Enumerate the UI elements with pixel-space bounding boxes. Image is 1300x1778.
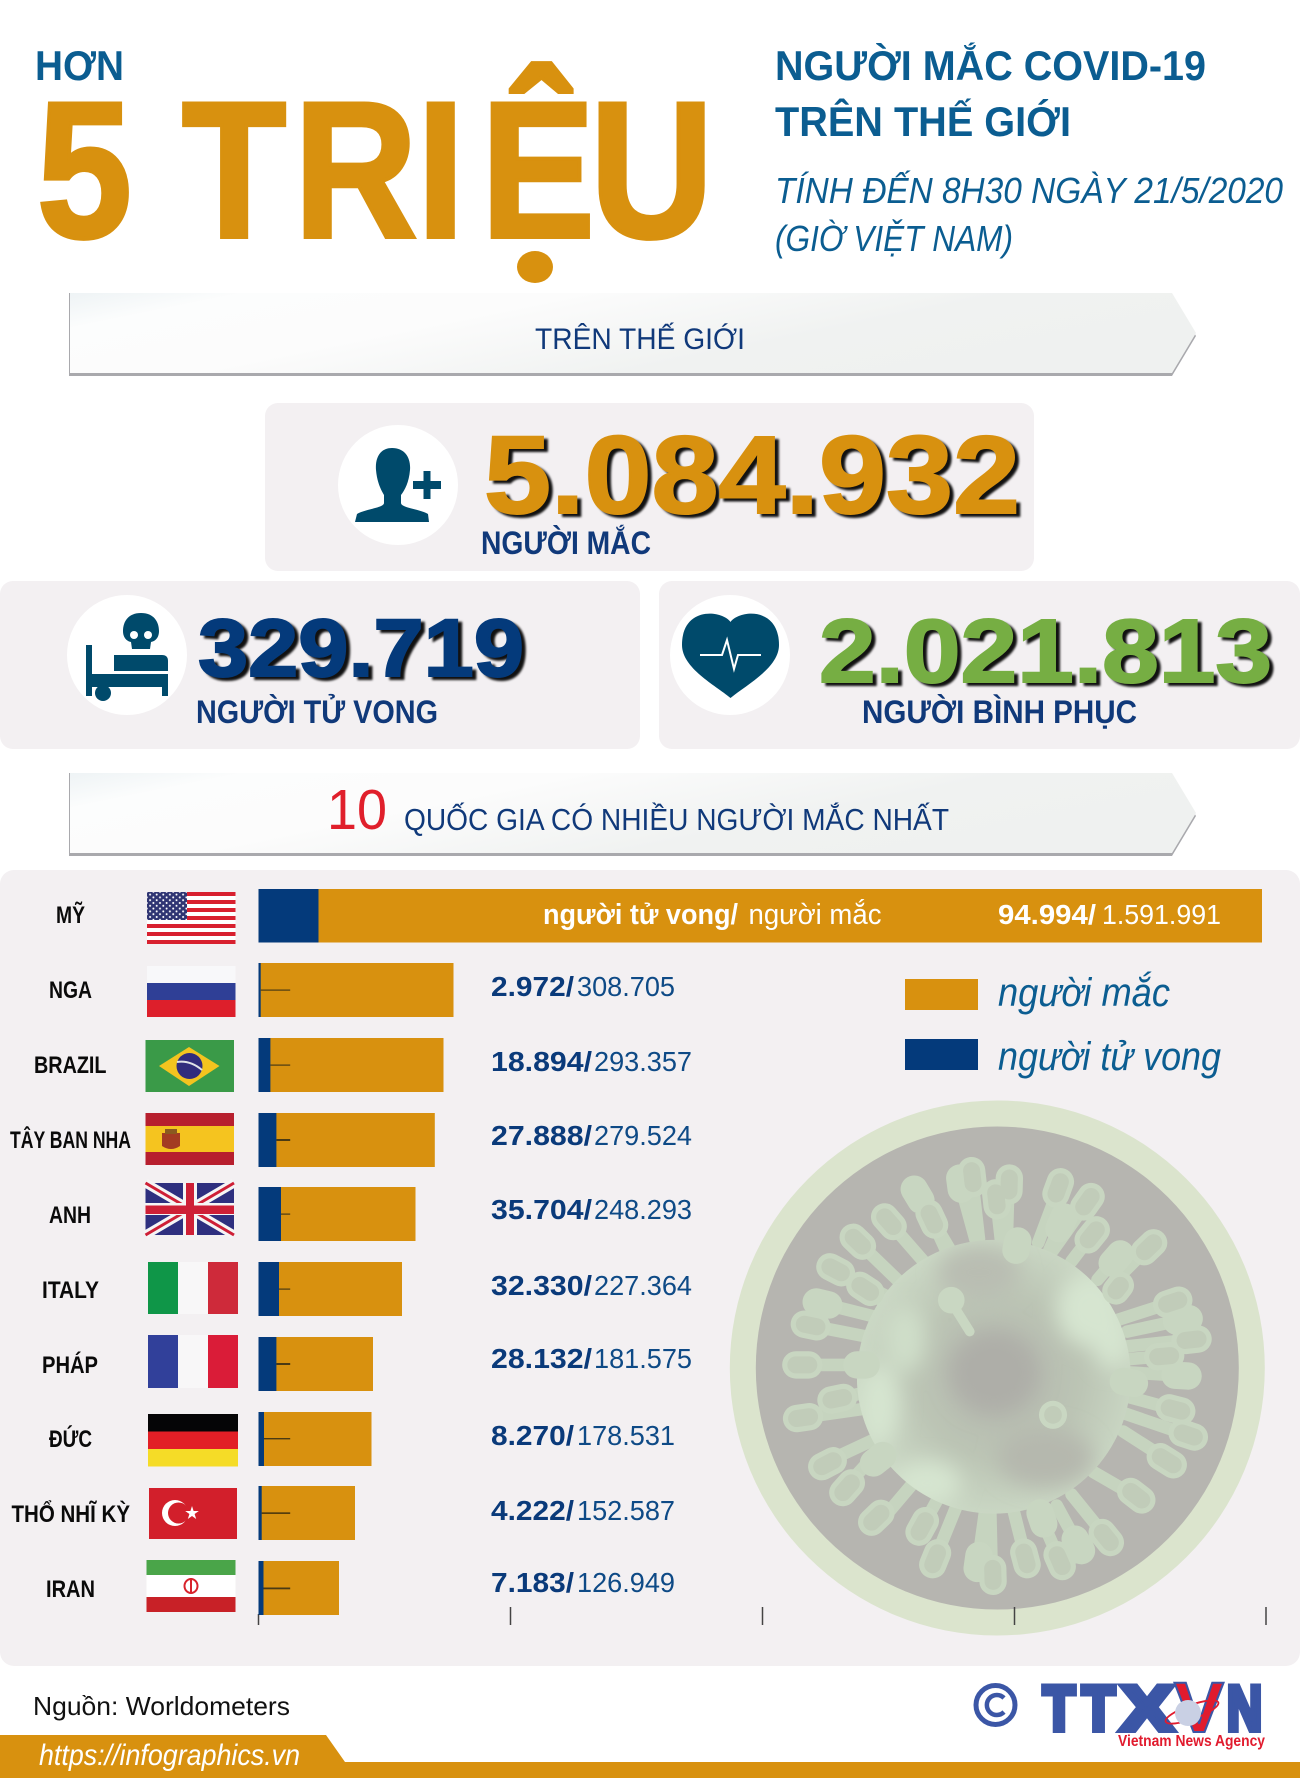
row: Nga bbox=[49, 963, 675, 1017]
label: người tử vong: NGƯỜI TỬ VONG bbox=[196, 694, 438, 730]
bar: Mỹ: người tử vong/ bbox=[543, 899, 738, 931]
heading: 5 triệu: 5 TRIỆU bbox=[37, 62, 713, 278]
icon: hospital bed and skull bbox=[67, 595, 187, 715]
value: 27.888/ bbox=[491, 1120, 592, 1151]
label: MỸ bbox=[56, 901, 85, 929]
number: người bình phục: 2.021.813 bbox=[819, 602, 1272, 702]
bar: Thổ Nhĩ Kỳ bbox=[258, 1486, 355, 1540]
title: TRÊN THẾ GIỚI bbox=[775, 97, 1071, 145]
number: người mắc: 5.084.932 bbox=[484, 414, 1020, 537]
value: 279.524 bbox=[594, 1120, 692, 1151]
flag: Spain bbox=[146, 1113, 234, 1165]
row: Brazil bbox=[34, 1038, 692, 1092]
value: 32.330/ bbox=[491, 1270, 592, 1301]
bar: Italy bbox=[258, 1262, 402, 1316]
row: Anh bbox=[49, 1183, 692, 1241]
value: 18.894/ bbox=[491, 1046, 592, 1077]
value: 227.364 bbox=[594, 1270, 692, 1301]
footer band: https://infographics.vn bbox=[39, 1739, 300, 1772]
panel: chart background bbox=[0, 870, 1300, 1666]
value bbox=[491, 1120, 692, 1151]
title bbox=[775, 41, 1206, 145]
row: Thổ Nhĩ Kỳ bbox=[12, 1486, 675, 1540]
panel: người tử vong bbox=[0, 581, 640, 749]
label: IRAN bbox=[46, 1576, 95, 1603]
row: Iran bbox=[46, 1560, 675, 1615]
value bbox=[491, 1046, 692, 1077]
bar: Mỹ: 94.994/ bbox=[998, 899, 1096, 930]
number: người tử vong: 329.719 bbox=[198, 603, 524, 694]
label: NGA bbox=[49, 977, 92, 1004]
value bbox=[491, 1495, 675, 1526]
banner: 10 quốc gia bbox=[69, 773, 1196, 856]
bar: Đức bbox=[258, 1412, 372, 1466]
title: NGƯỜI MẮC COVID-19 bbox=[775, 41, 1206, 89]
panel: người bình phục bbox=[659, 581, 1300, 749]
panel: người mắc bbox=[265, 403, 1034, 571]
logo: TTXVN: N bbox=[1227, 1674, 1262, 1744]
row: Pháp bbox=[42, 1335, 692, 1391]
logo: TTXVN: T bbox=[1043, 1674, 1075, 1744]
value bbox=[491, 1567, 675, 1598]
label: PHÁP bbox=[42, 1351, 98, 1379]
label: người mắc: NGƯỜI MẮC bbox=[481, 525, 651, 561]
image: virus bbox=[730, 1100, 1265, 1636]
bar: Anh bbox=[258, 1187, 416, 1241]
value: 4.222/ bbox=[491, 1495, 574, 1526]
flag: USA bbox=[147, 892, 236, 944]
icon: person plus bbox=[338, 425, 458, 545]
row: Italy bbox=[42, 1262, 692, 1316]
value: 126.949 bbox=[577, 1567, 675, 1598]
value bbox=[491, 1194, 692, 1225]
source: Nguồn: Worldometers bbox=[33, 1691, 290, 1721]
date note bbox=[775, 169, 1283, 259]
value: 178.531 bbox=[577, 1420, 675, 1451]
flag: UK bbox=[146, 1183, 234, 1235]
banner: 10 quốc gia: QUỐC GIA CÓ NHIỀU NGƯỜI MẮC NHẤT bbox=[404, 801, 949, 837]
logo: TTXVN: Vietnam News Agency bbox=[1118, 1733, 1265, 1750]
bar: Iran bbox=[258, 1561, 339, 1615]
bar: Tây Ban Nha bbox=[258, 1113, 435, 1167]
value: 28.132/ bbox=[491, 1343, 592, 1374]
flag: Germany bbox=[148, 1414, 238, 1466]
banner: trên thế giới: TRÊN THẾ GIỚI bbox=[535, 322, 745, 356]
value: 308.705 bbox=[577, 971, 675, 1002]
logo: TTXVN: T bbox=[1082, 1674, 1115, 1744]
value bbox=[491, 971, 675, 1002]
value bbox=[491, 1343, 692, 1374]
legend: người tử vong bbox=[998, 1035, 1221, 1079]
footer band bbox=[0, 1735, 1300, 1778]
value: 2.972/ bbox=[491, 971, 574, 1002]
logo: TTXVN: V bbox=[1174, 1669, 1224, 1748]
label: ĐỨC bbox=[49, 1425, 92, 1453]
value: 293.357 bbox=[594, 1046, 692, 1077]
label: ANH bbox=[49, 1202, 91, 1229]
row: Đức bbox=[49, 1412, 675, 1466]
label: BRAZIL bbox=[34, 1052, 106, 1079]
axis ticks bbox=[258, 1607, 1266, 1625]
logo: TTXVN: X bbox=[1121, 1674, 1173, 1744]
value: 8.270/ bbox=[491, 1420, 574, 1451]
bar: Nga bbox=[258, 963, 454, 1017]
value: 35.704/ bbox=[491, 1194, 592, 1225]
value bbox=[491, 1420, 675, 1451]
bar: Brazil bbox=[258, 1038, 444, 1092]
flag: France bbox=[148, 1335, 238, 1388]
flag: Brazil bbox=[146, 1040, 234, 1092]
value: 152.587 bbox=[577, 1495, 675, 1526]
flag: Turkey bbox=[149, 1488, 237, 1539]
banner: trên thế giới bbox=[69, 293, 1196, 376]
label: ITALY bbox=[42, 1277, 99, 1304]
label: người bình phục: NGƯỜI BÌNH PHỤC bbox=[862, 694, 1137, 730]
banner: 10 quốc gia: 10 bbox=[327, 778, 387, 842]
legend: người mắc bbox=[998, 970, 1170, 1015]
bar: Mỹ: người mắc bbox=[748, 898, 882, 931]
flag: Russia bbox=[147, 966, 236, 1017]
row: Mỹ bbox=[56, 889, 1262, 944]
flag: Italy bbox=[148, 1262, 238, 1314]
icon: heart with pulse bbox=[670, 595, 790, 715]
label: TÂY BAN NHA bbox=[10, 1126, 131, 1154]
value: 248.293 bbox=[594, 1194, 692, 1225]
label: THỔ NHĨ KỲ bbox=[12, 1500, 130, 1528]
value: 181.575 bbox=[594, 1343, 692, 1374]
date note: (GIỜ VIỆT NAM) bbox=[775, 218, 1013, 259]
legend bbox=[905, 970, 1221, 1079]
heading: hơn: HƠN bbox=[35, 42, 124, 89]
value: 7.183/ bbox=[491, 1567, 574, 1598]
bar: Pháp bbox=[258, 1337, 373, 1391]
logo: TTXVN bbox=[976, 1669, 1265, 1750]
bar: Mỹ bbox=[258, 889, 1262, 942]
row: Tây Ban Nha bbox=[10, 1113, 692, 1167]
value bbox=[491, 1270, 692, 1301]
flag: Iran bbox=[146, 1560, 236, 1612]
bar: Mỹ: 1.591.991 bbox=[1102, 899, 1221, 930]
